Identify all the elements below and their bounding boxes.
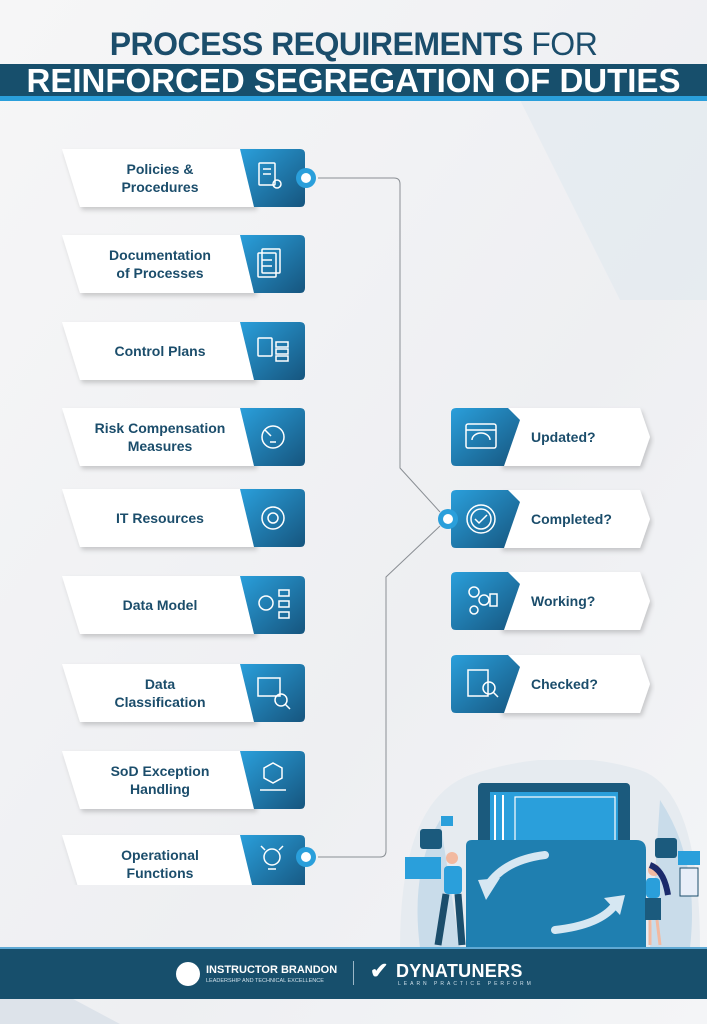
logo: instructor brandon: LEADERSHIP AND TECHNICAL EXCELLENCE — [206, 978, 324, 984]
left requirement list: Classification — [114, 694, 206, 710]
card labels: Policies & — [127, 161, 193, 177]
left requirement list — [62, 149, 316, 885]
left requirement list: Data Model — [123, 597, 197, 613]
logo: dynatuners: LEARN PRACTICE PERFORM — [398, 981, 534, 987]
title line 1: PROCESS REQUIREMENTS FOR — [110, 26, 597, 62]
left requirement list: of Processes — [116, 265, 204, 281]
card labels: Procedures — [121, 179, 199, 195]
left requirement list: Control Plans — [114, 343, 206, 359]
logo: dynatuners: DYNATUNERS — [396, 961, 523, 981]
left requirement list: Data — [145, 676, 175, 692]
logo: dynatuners: ✔ — [370, 958, 388, 983]
left requirement list: Documentation — [109, 247, 211, 263]
illustration: folder with people — [400, 760, 700, 947]
left requirement list: Measures — [128, 438, 192, 454]
left requirement list: Handling — [130, 781, 190, 797]
left requirement list: Functions — [127, 865, 193, 881]
left requirement list: Risk Compensation — [95, 420, 225, 436]
right checks list — [438, 408, 654, 718]
logo: dynatuners — [370, 958, 534, 987]
connector nodes — [296, 168, 316, 188]
left requirement list: Operational — [121, 847, 199, 863]
left requirement list: SoD Exception — [111, 763, 209, 779]
logo: instructor brandon: INSTRUCTOR BRANDON — [206, 964, 337, 976]
title — [0, 26, 707, 101]
card labels — [121, 161, 199, 195]
right checks list: Working? — [531, 593, 595, 609]
connector lines — [318, 178, 440, 857]
title band — [0, 64, 707, 101]
right checks list: Completed? — [531, 511, 612, 527]
title line 2: REINFORCED SEGREGATION OF DUTIES — [27, 62, 680, 99]
right checks list: Updated? — [531, 429, 596, 445]
left requirement list: IT Resources — [116, 510, 204, 526]
footer band — [0, 947, 707, 999]
right checks list: Checked? — [531, 676, 598, 692]
logo: instructor brandon — [176, 962, 337, 986]
